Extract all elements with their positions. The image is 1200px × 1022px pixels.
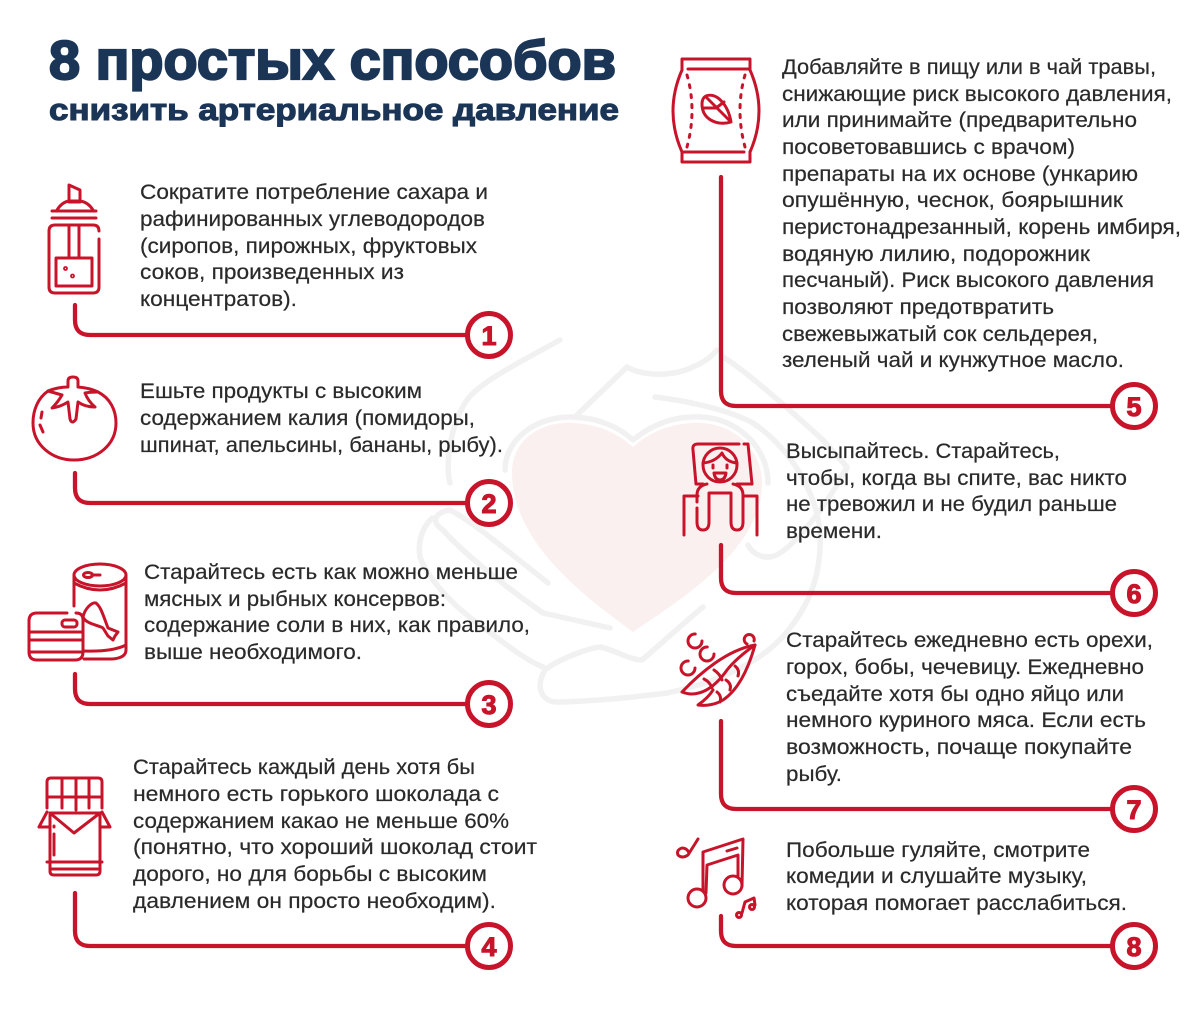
badge 1: 1 [481,321,497,351]
badge 4 [468,924,510,968]
badge 2: 2 [481,489,497,519]
title [49,29,619,127]
icon: chocolate bar [39,778,110,875]
badge 7: 7 [1126,795,1142,825]
connector 5 [721,177,1113,406]
text 6: Высыпайтесь. Старайтесь, [786,440,1060,463]
text 5: снижающие риск высокого давления, [782,83,1172,106]
icon: music notes [678,839,755,918]
text 5: песчаный). Риск высокого давления [782,269,1154,292]
badge 8 [1112,924,1156,968]
connector 3 [75,674,468,704]
badge 8: 8 [1126,932,1142,962]
badge 1 [468,314,510,356]
panel: step 3 [29,561,530,726]
icon: sugar dispenser [49,185,99,293]
text 2: содержанием калия (помидоры, [140,407,475,430]
text 7: съедайте хотя бы одно яйцо или [786,683,1124,706]
text 3: мясных и рыбных консервов: [144,588,446,611]
connector 4 [75,893,468,946]
text 1: рафинированных углеводородов [140,208,485,231]
text 8 [786,839,1127,915]
text 1: соков, произведенных из [140,261,404,284]
badge 6: 6 [1126,579,1142,609]
connector 1 [75,305,468,335]
title: 8 простых способов [49,29,616,91]
badge 3 [468,682,510,726]
panel: step 8 [678,839,1156,968]
text 2: Ешьте продукты с высоким [140,380,422,403]
text 7: немного куриного мяса. Если есть [786,709,1146,732]
text 5: водяную лилию, подорожник [782,243,1091,266]
text 3: содержание соли в них, как правило, [144,614,530,637]
badge 5: 5 [1126,392,1142,422]
text 8: Побольше гуляйте, смотрите [786,839,1090,862]
panel: step 2 [33,377,510,524]
icon: canned food [29,564,126,660]
badge 6 [1112,572,1156,614]
text 4 [133,756,537,913]
text 6 [786,440,1127,543]
text 5: свежевыжатый сок сельдерея, [782,323,1098,346]
text 7: рыбу. [786,763,842,786]
background: heart held by hands [419,340,847,702]
icon: pea pods [681,634,755,705]
badge 2 [468,482,510,524]
text 4: (понятно, что хороший шоколад стоит [133,836,537,859]
text 8: комедии и слушайте музыку, [786,865,1087,888]
text 4: дорого, но для борьбы с высоким [133,863,487,886]
text 1: концентратов). [140,288,297,311]
text 4: содержанием какао не меньше 60% [133,810,509,833]
badge 3: 3 [481,690,497,720]
text 2: шпинат, апельсины, бананы, рыбу). [140,434,503,457]
text 4: Старайтесь каждый день хотя бы [133,756,475,779]
panel: step 6 [684,440,1156,614]
text 3: выше необходимого. [144,641,362,664]
text 5 [782,56,1181,372]
badge 7 [1112,788,1156,830]
text 1 [140,181,488,311]
connector 7 [721,721,1113,809]
connector 8 [721,916,1113,946]
text 5: или принимайте (предварительно [782,109,1137,132]
text 1: Сократите потребление сахара и [140,181,488,204]
text 5: Добавляйте в пищу или в чай травы, [782,56,1156,79]
text 3 [144,561,530,664]
text 4: немного есть горького шоколада с [133,783,499,806]
icon: tomato [33,377,116,460]
text 7: возможность, почаще покупайте [786,736,1132,759]
text 6: не тревожил и не будил раньше [786,493,1117,516]
text 7: горох, бобы, чечевицу. Ежедневно [786,656,1144,679]
text 8: которая помогает расслабиться. [786,892,1127,915]
text 5: посоветовавшись с врачом) [782,136,1075,159]
connector 6 [721,545,1113,593]
text 5: опушённую, чеснок, боярышник [782,189,1124,212]
text 1: (сиропов, пирожных, фруктовых [140,235,478,258]
text 6: чтобы, когда вы спите, вас никто [786,467,1127,490]
text 5: перистонадрезанный, корень имбиря, [782,216,1181,239]
text 7 [786,629,1153,786]
text 5: зеленый чай и кунжутное масло. [782,349,1124,372]
text 3: Старайтесь есть как можно меньше [144,561,518,584]
title: снизить артериальное давление [49,92,619,127]
badge 4: 4 [481,932,497,962]
text 5: позволяют предотвратить [782,296,1054,319]
panel: step 7 [681,629,1156,830]
text 5: препараты на их основе (ункарию [782,163,1138,186]
connector 2 [75,473,468,503]
icon: herb bag [673,59,759,162]
text 7: Старайтесь ежедневно есть орехи, [786,629,1153,652]
icon: sleeping person [684,444,757,535]
text 6: времени. [786,520,882,543]
badge 5 [1112,384,1156,428]
panel: step 5 [673,56,1181,428]
text 4: давлением он просто необходим). [133,890,496,913]
panel: step 1 [49,181,510,356]
text 2 [140,380,503,457]
panel: step 4 [39,756,537,968]
